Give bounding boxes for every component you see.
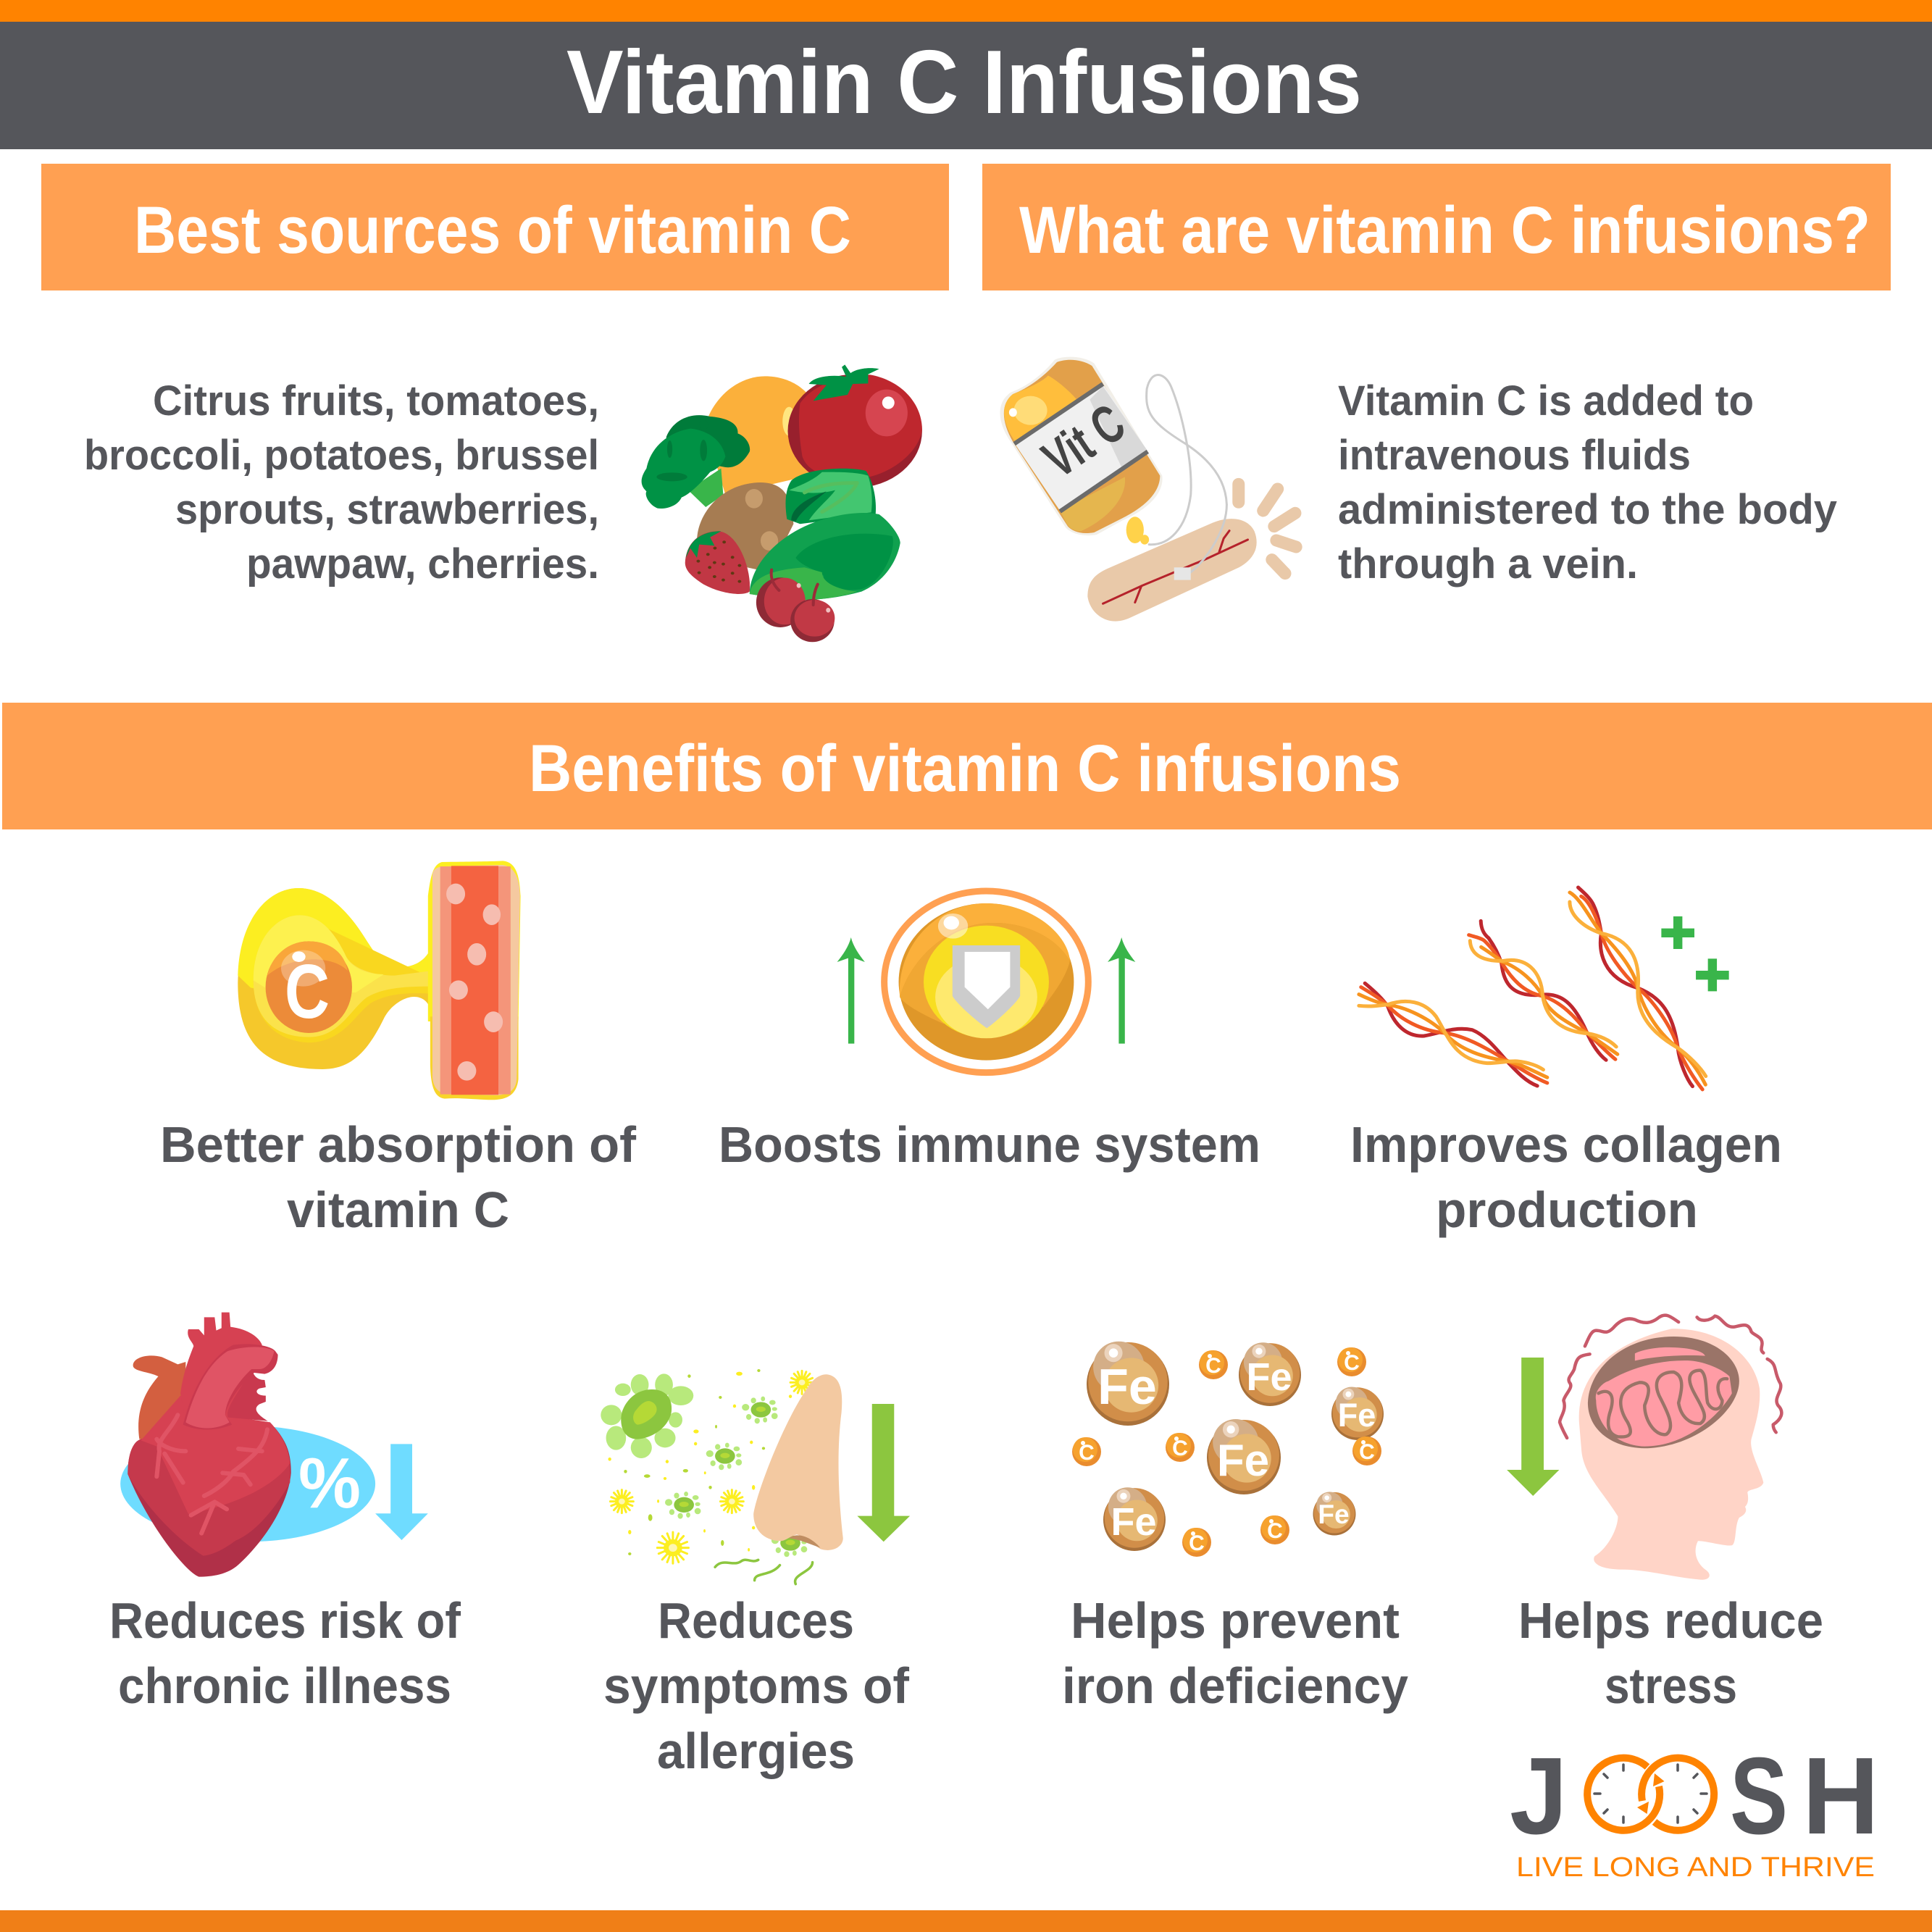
bottom accent bar [0,1910,1932,1932]
icon: iron and vitamin C particles: C [1205,1354,1221,1378]
icon: immune system shield with arrows [837,891,1135,1073]
label: prevent iron deficiency: Helps prevent [1071,1592,1400,1649]
icon: iron and vitamin C particles: Fe [1097,1358,1157,1415]
icon: collagen strands [1359,887,1729,1090]
text block: citrus sources: broccoli, potatoes, brussel [84,432,599,479]
icon: iron and vitamin C particles: Fe [1217,1436,1269,1486]
logo: Joosh: LIVE LONG AND THRIVE [1516,1852,1875,1883]
label: improves collagen [1350,1116,1782,1238]
text block: citrus sources [84,377,599,587]
label: prevent iron deficiency [1062,1592,1408,1714]
icon: iron and vitamin C particles: C [1079,1441,1095,1465]
label: improves collagen: production [1436,1182,1698,1238]
icon: stressed head with brain [1507,1316,1781,1580]
text block: citrus sources: sprouts, strawberries, [175,486,599,533]
label: reduces allergies: symptoms of [603,1657,910,1714]
icon: allergens and nose [601,1369,910,1584]
icon: iron and vitamin C particles [1072,1342,1384,1557]
icon: iron and vitamin C particles: Fe [1318,1500,1350,1529]
icon: absorption into blood vessel: C [285,949,330,1034]
label: reduces risk [109,1592,461,1714]
label: improves collagen: Improves collagen [1350,1116,1782,1173]
label: reduces allergies: allergies [657,1723,855,1779]
label: reduces allergies: Reduces [658,1592,854,1649]
logo: Joosh: S [1730,1734,1788,1857]
logo: Joosh: J [1510,1734,1568,1857]
label: better absorption: Better absorption of [160,1116,637,1173]
label: reduces allergies [603,1592,910,1779]
text block: what infusions are [1338,377,1837,587]
label: reduce stress: Helps reduce [1518,1592,1823,1649]
heading: best sources of vitamin C [41,164,949,290]
icon: vitamin C infusion bag and arm [1000,357,1296,622]
icon: fruit and vegetables [642,364,922,642]
icon: iron and vitamin C particles: C [1344,1351,1360,1375]
text block: citrus sources: pawpaw, cherries. [246,540,599,587]
label: better absorption [160,1116,637,1238]
icon: iron and vitamin C particles: Fe [1246,1355,1292,1399]
text block: what infusions are: Vitamin C is added to [1338,377,1754,425]
icon: vitamin C infusion bag and arm: Vit C [1032,393,1135,489]
icon: heart with percent: % [298,1443,361,1523]
icon: absorption into blood vessel [238,861,521,1100]
icon: iron and vitamin C particles: C [1267,1519,1283,1543]
text block: what infusions are: administered to the body [1338,486,1837,533]
text block: what infusions are: intravenous fluids [1338,432,1691,479]
icon: iron and vitamin C particles: C [1189,1531,1205,1555]
heading: benefits banner: Benefits of vitamin C infusions [529,732,1401,806]
label: prevent iron deficiency: iron deficiency [1062,1657,1408,1714]
label: reduce stress: stress [1605,1657,1737,1714]
label: reduces risk: Reduces risk of [109,1592,461,1649]
top accent bar [0,0,1932,22]
title banner [0,22,1932,149]
icon: iron and vitamin C particles: Fe [1338,1397,1376,1434]
label: reduce stress [1518,1592,1823,1714]
title banner: Vitamin C Infusions [566,33,1362,133]
icon: iron and vitamin C particles: C [1359,1440,1375,1464]
icon: heart with percent [120,1313,428,1577]
label: reduces risk: chronic illness [118,1657,451,1714]
heading: what are vitamin C infusions [982,164,1891,290]
label: boosts immune system: Boosts immune system [719,1116,1260,1173]
heading: best sources of vitamin C: Best sources of vitamin C [134,193,851,267]
logo: Joosh: H [1802,1734,1879,1857]
icon: iron and vitamin C particles: Fe [1111,1500,1157,1544]
label: better absorption: vitamin C [287,1182,509,1238]
logo: Joosh [1510,1734,1879,1883]
text block: citrus sources: Citrus fruits, tomatoes, [153,377,599,425]
heading: benefits banner [2,703,1932,829]
icon: iron and vitamin C particles: C [1172,1437,1188,1460]
text block: what infusions are: through a vein. [1338,540,1638,587]
